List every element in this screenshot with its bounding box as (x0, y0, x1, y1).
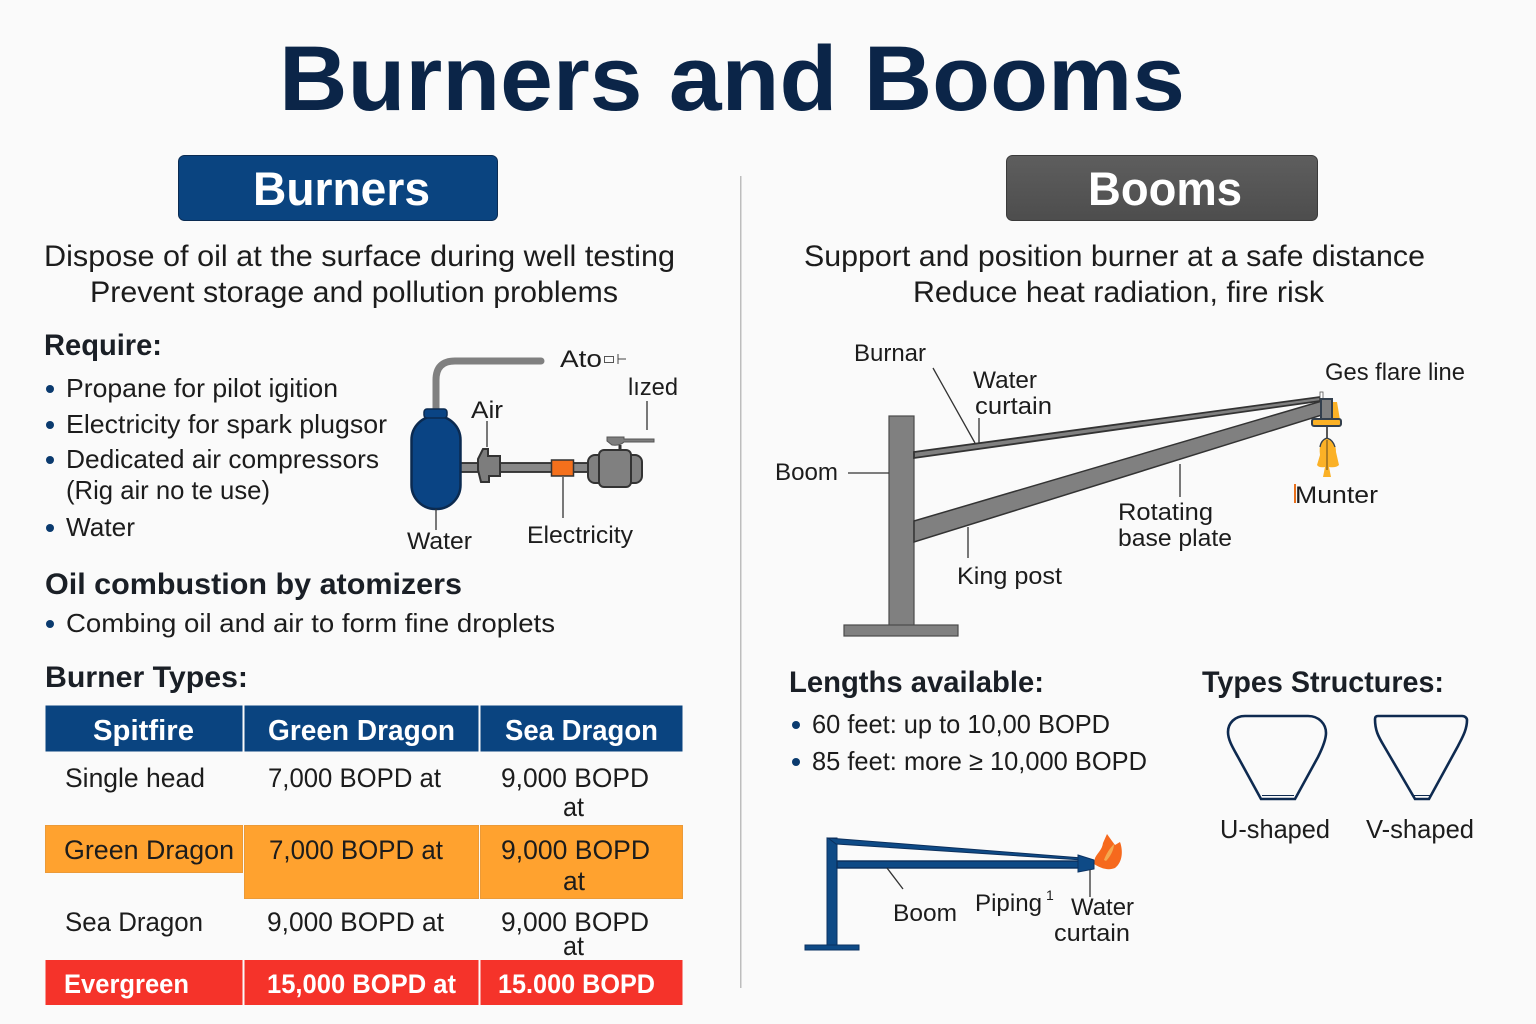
oil combustion section: Oil combustion by atomizers (45, 568, 462, 601)
label: water curtain: curtain (975, 393, 1052, 420)
label: king post: King post (957, 563, 1062, 590)
label: piping: Piping (975, 890, 1042, 917)
label: piping: 1 (1046, 887, 1054, 903)
burners purpose text (44, 240, 675, 309)
air valve (478, 449, 500, 482)
water tank (412, 416, 460, 509)
electric igniter (552, 460, 574, 476)
leader lines (436, 401, 647, 530)
row: evergreen (46, 960, 682, 1005)
center divider (740, 176, 742, 988)
require list: Propane for pilot igition (66, 373, 338, 403)
table header (46, 706, 682, 752)
lengths available: 60 feet: up to 10,00 BOPD (812, 709, 1110, 739)
row: green dragon: 9,000 BOPD (501, 835, 650, 865)
label: atomized: Ato (560, 346, 602, 373)
heading: Booms (1006, 156, 1318, 220)
burners purpose text: Dispose of oil at the surface during well testing (44, 240, 675, 273)
panel: booms (775, 156, 1474, 950)
burner system diagram (407, 346, 678, 555)
leader lines (887, 868, 1090, 897)
icon: v-shaped: V-shaped (1366, 814, 1474, 844)
label: air: Air (471, 397, 503, 424)
title: Burners and Booms (279, 28, 1185, 130)
label: atomized (560, 346, 678, 401)
oil combustion section: Combing oil and air to form fine droplets (66, 608, 555, 638)
label: rotating base plate: Rotating (1118, 499, 1213, 526)
flame (1094, 834, 1122, 869)
lengths available (789, 666, 1147, 776)
types structures: Types Structures: (1202, 666, 1444, 699)
row: single head: at (563, 792, 584, 822)
main boom arm (914, 401, 1322, 542)
oil combustion section (45, 568, 555, 638)
icon: u-shaped (1220, 716, 1330, 844)
row: sea dragon (65, 907, 649, 961)
row: green dragon: 7,000 BOPD at (269, 835, 443, 865)
label: water: Water (407, 528, 472, 555)
label: electricity: Electricity (527, 522, 633, 549)
row: sea dragon: 9,000 BOPD at (267, 907, 444, 937)
main pipe (460, 463, 592, 472)
label: water curtain: Water (1071, 894, 1134, 921)
nozzle (1078, 855, 1094, 872)
require list: Electricity for spark plugsor (66, 409, 387, 439)
heading: Booms: Booms (1088, 162, 1242, 215)
burners purpose text: Prevent storage and pollution problems (90, 276, 618, 309)
icon: v-shaped (1366, 716, 1474, 844)
row: green dragon: at (563, 866, 585, 896)
label: atomized: lızed (628, 374, 678, 401)
require list: Water (66, 512, 135, 542)
table header: Spitfire (93, 715, 194, 747)
label: burnar: Burnar (854, 340, 926, 367)
label: boom: Boom (775, 459, 838, 486)
label: rotating base plate (1118, 499, 1232, 552)
booms purpose text (804, 240, 1425, 309)
table header: Sea Dragon (505, 715, 658, 747)
booms purpose text: Reduce heat radiation, fire risk (913, 276, 1325, 309)
require list: (Rig air no te use) (66, 475, 270, 505)
small boom diagram (805, 834, 1134, 950)
label: rotating base plate: base plate (1118, 525, 1232, 552)
row: sea dragon: at (563, 931, 584, 961)
booms purpose text: Support and position burner at a safe distance (804, 240, 1425, 273)
burner head and flame (1312, 392, 1341, 477)
row: evergreen: Evergreen (64, 969, 189, 999)
label: water curtain: Water (973, 367, 1037, 394)
label: water curtain (1054, 894, 1134, 947)
label: water curtain (973, 367, 1052, 420)
row: sea dragon: 9,000 BOPD (501, 907, 649, 937)
row: single head: 7,000 BOPD at (268, 763, 441, 793)
row: green dragon: Green Dragon (64, 835, 234, 865)
row: green dragon (46, 826, 682, 898)
frame (805, 838, 1082, 950)
burner types heading: Burner Types: (45, 661, 248, 694)
table header: Green Dragon (268, 715, 455, 747)
row: evergreen: 15.000 BOPD (498, 969, 655, 999)
row: sea dragon: Sea Dragon (65, 907, 203, 937)
label: boom: Boom (893, 900, 957, 927)
atomizer pump (588, 437, 654, 487)
panel: burners (44, 156, 682, 1005)
heading: Burners (178, 156, 498, 220)
row: single head: Single head (65, 763, 205, 793)
require list: Dedicated air compressors (66, 444, 379, 474)
row: single head (65, 763, 649, 822)
king post and base (844, 416, 958, 636)
gas line (436, 361, 541, 410)
label: gas flare line: Ges flare line (1325, 359, 1465, 386)
heading: Burners: Burners (253, 162, 430, 215)
upper tie beam (914, 397, 1320, 458)
leader lines (848, 368, 1180, 558)
row: evergreen: 15,000 BOPD at (267, 969, 456, 999)
label: munter: Munter (1295, 482, 1378, 509)
icon: u-shaped: U-shaped (1220, 814, 1330, 844)
lengths available: Lengths available: (789, 666, 1044, 699)
boom structure diagram (775, 340, 1465, 636)
require list (46, 373, 387, 542)
burner types table (46, 706, 682, 1005)
lengths available: 85 feet: more ≥ 10,000 BOPD (812, 746, 1147, 776)
row: single head: 9,000 BOPD (501, 763, 649, 793)
types structures (1202, 666, 1474, 844)
require heading: Require: (44, 329, 162, 362)
label: water curtain: curtain (1054, 920, 1130, 947)
